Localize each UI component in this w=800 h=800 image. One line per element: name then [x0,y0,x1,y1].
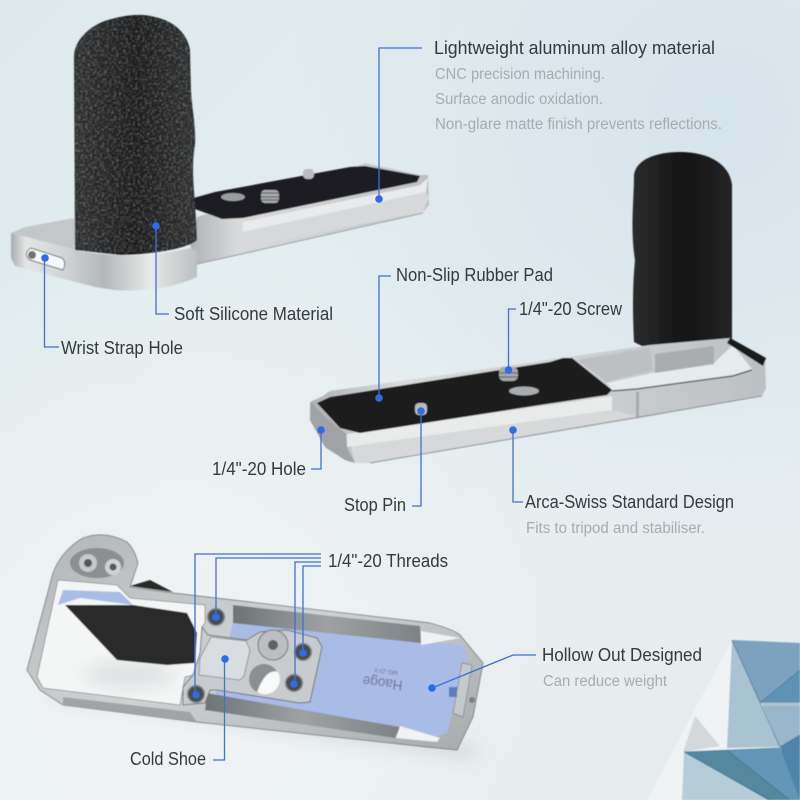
callout: hole: 1/4"-20 Hole [212,459,306,479]
frame outer [27,535,483,750]
callout: non-slip rubber pad [375,265,553,402]
frame window [607,345,752,390]
drop shadow [50,690,480,760]
callout: non-slip rubber pad: Non-Slip Rubber Pad [396,265,553,285]
callout: wrist strap hole: Wrist Strap Hole [61,338,183,358]
heading: Hollow Out Designed [542,645,702,665]
product: top bracket view [11,15,429,290]
lobe with screws [70,548,124,578]
callout: screw [505,299,623,374]
leader line [379,48,422,199]
callout: soft silicone [152,222,333,324]
description: Fits to tripod and stabiliser. [526,520,705,537]
dot [375,195,383,203]
decorative geometric polygons bottom right [647,640,800,800]
lower arca rail [347,396,640,463]
plate hole [509,386,539,396]
blue band [58,590,133,605]
heading: Lightweight aluminum alloy material [434,38,715,58]
callout: wrist strap hole [41,254,183,358]
callout: cold shoe: Cold Shoe [130,749,206,769]
left window [37,580,207,705]
callout: lightweight aluminum alloy [375,38,722,203]
frame underside shade [63,697,197,722]
side hole [469,697,475,703]
inner walls [233,605,421,643]
callout: stop pin [344,407,425,515]
centre cold shoe plate [183,627,322,705]
pin [415,403,427,415]
inner wall [577,348,653,382]
screw [499,367,518,381]
small latch [449,687,457,697]
frame body [310,338,766,463]
callout: hollow out [428,645,702,692]
frame front band [11,217,197,290]
product: plate bottom-angle view [310,152,766,463]
centre screw [258,630,288,660]
callout: arca-swiss [509,426,734,537]
product: underside view [27,535,483,760]
silicone grip [74,15,197,255]
brand mark: Haoge [362,673,403,694]
callout: soft silicone: Soft Silicone Material [174,304,333,324]
callout: screw: 1/4"-20 Screw [519,299,623,319]
feature one: CNC precision machining. [435,66,605,83]
callout: threads: 1/4"-20 Threads [328,551,448,571]
feature three: Non-glare matte finish prevents reflections. [435,116,722,133]
rubber pad [317,358,612,433]
window shadow [85,661,175,689]
callout: threads [192,551,448,699]
black grip seen through window [65,580,197,665]
through hole [249,664,280,694]
blue plate [213,622,467,737]
callout: hole [212,426,325,479]
threads holes [188,608,312,702]
bracket arm and plate [190,163,429,264]
description: Can reduce weight [543,673,668,690]
right edge bar [453,663,472,717]
rubber grip [632,152,732,350]
heading: Arca-Swiss Standard Design [525,492,734,512]
brand mark: MG-ZFX [374,666,398,675]
feature two: Surface anodic oxidation. [435,91,603,108]
callout: stop pin: Stop Pin [344,495,406,515]
callout: cold shoe [130,655,229,769]
